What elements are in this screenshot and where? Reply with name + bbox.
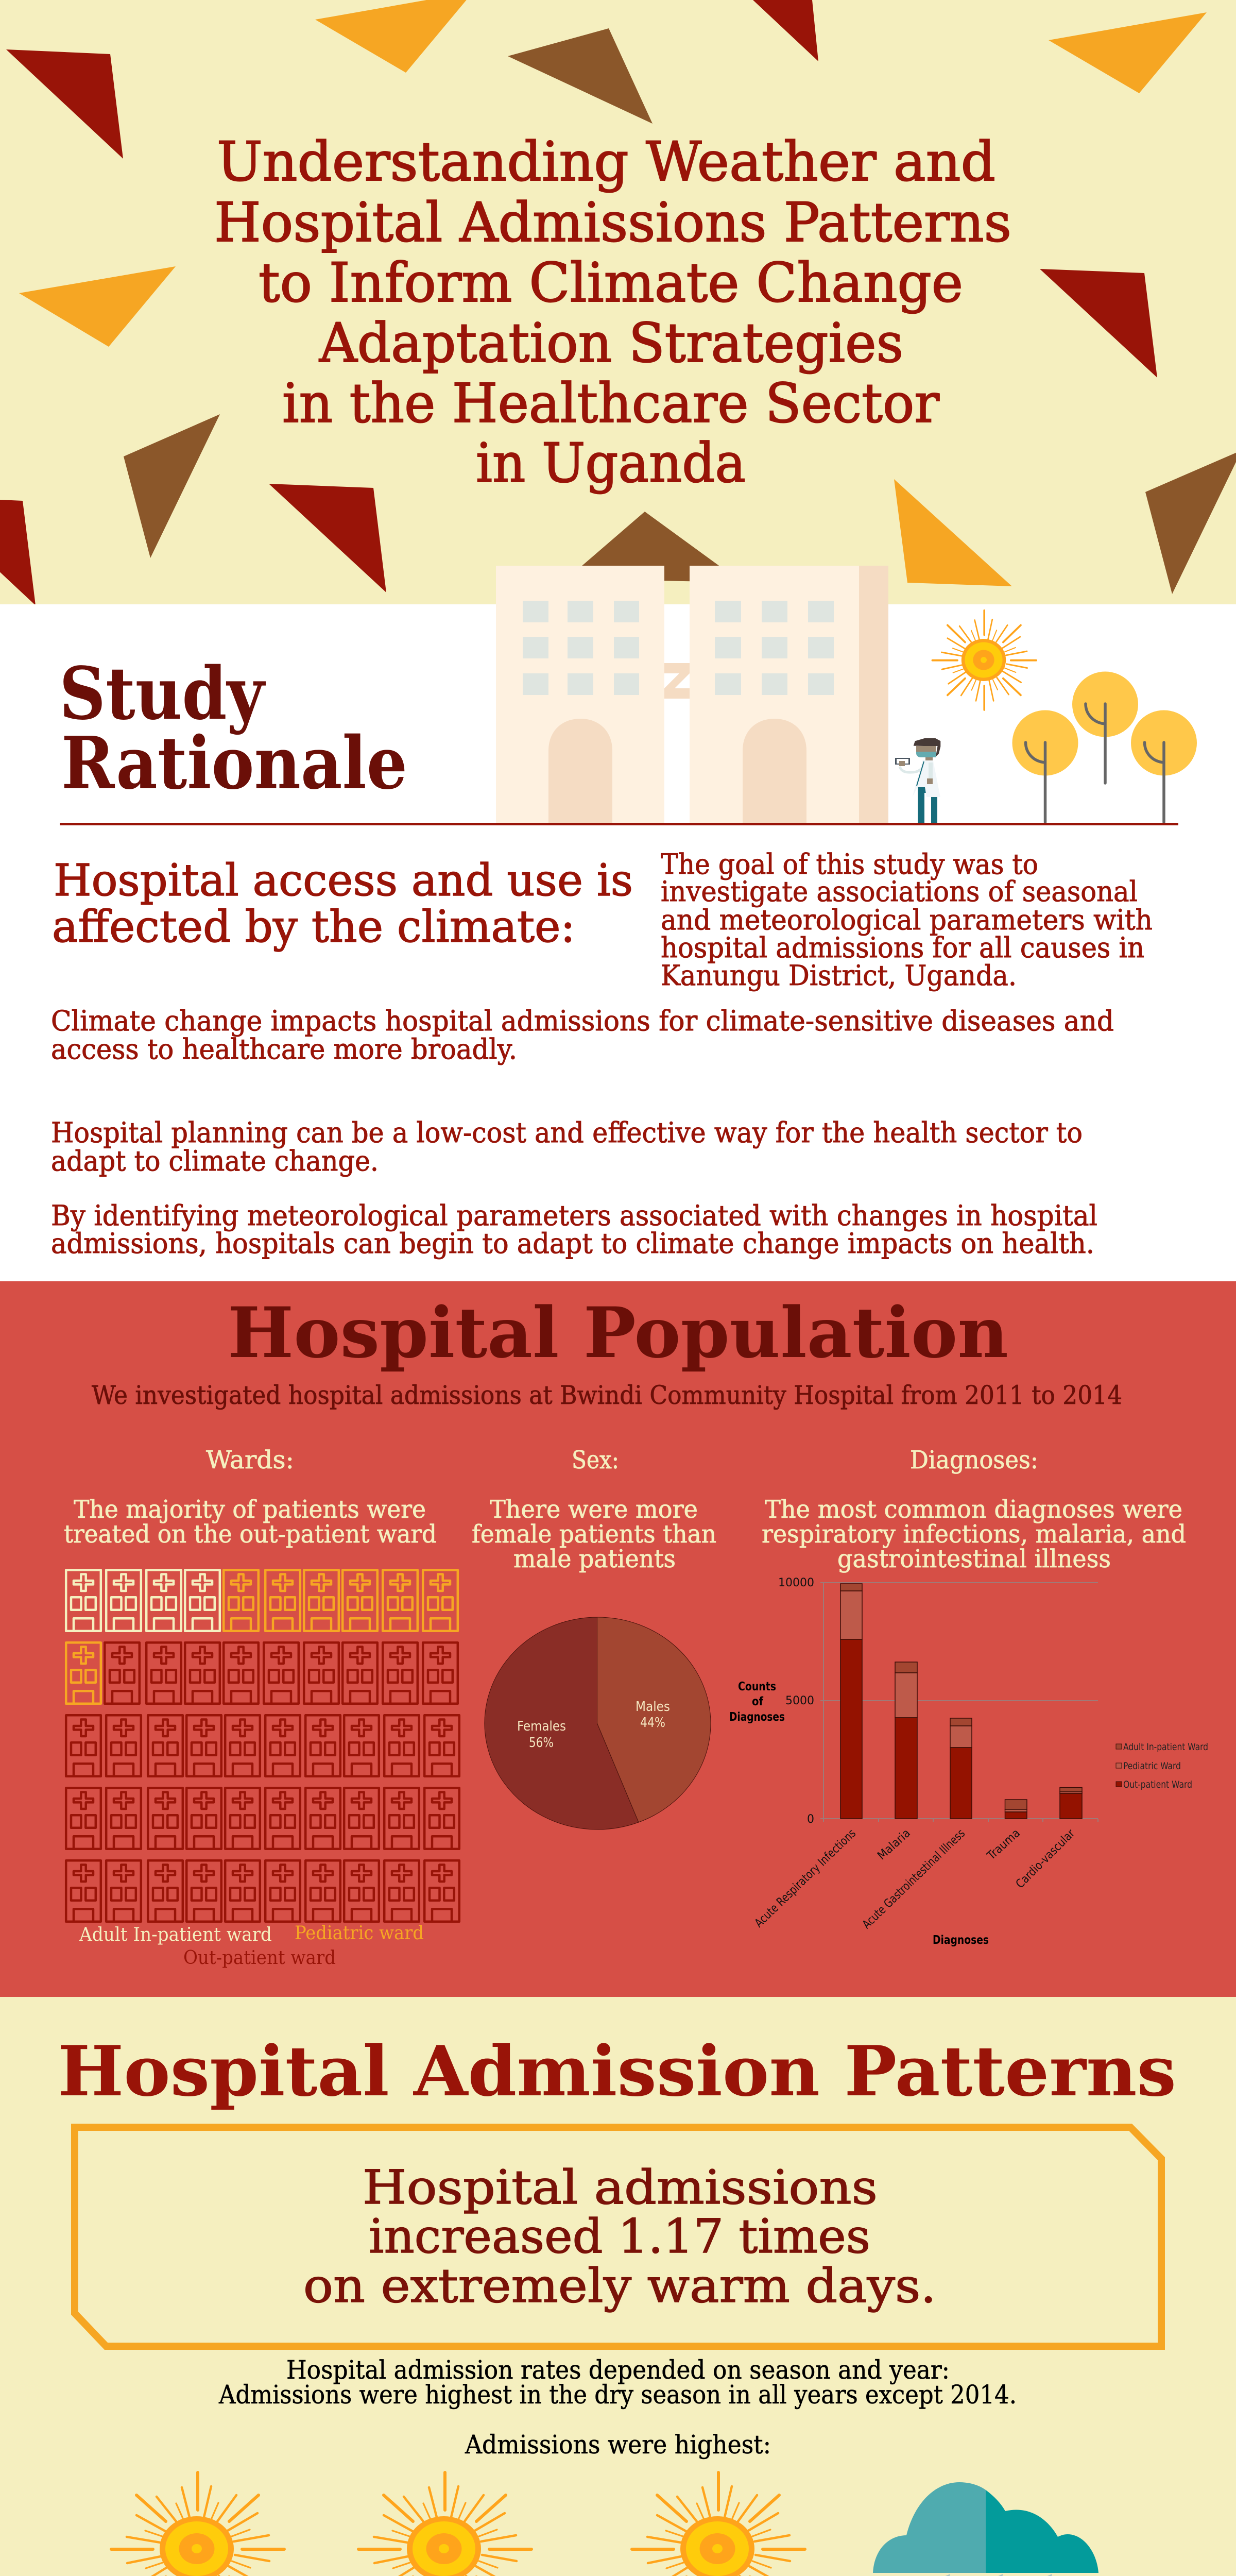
text: hospital planning: adapt to climate change. <box>51 1145 379 1177</box>
section heading: study rationale <box>59 652 407 806</box>
ground line <box>60 823 1178 825</box>
chart: diagnoses stacked bars: Acute Respiratory Infections <box>752 1827 859 1930</box>
callout text: increased 1.17 times <box>369 2210 870 2264</box>
subheading: climate access: affected by the climate: <box>52 902 575 953</box>
text: hospital planning <box>51 1116 1083 1177</box>
legend: wards: Pediatric ward <box>295 1923 424 1944</box>
text: study goal: hospital admissions for all causes in <box>661 931 1144 964</box>
subheading: diagnoses: respiratory infections, malaria, and <box>762 1520 1186 1549</box>
panel: study rationale <box>0 566 1236 1281</box>
text: identifying parameters <box>51 1199 1097 1260</box>
chart: sex pie: 56% <box>529 1735 554 1751</box>
icon: sun <box>932 611 1036 710</box>
panel: hospital admission patterns <box>0 1997 1236 2576</box>
title: Hospital Admissions Patterns <box>214 191 1011 254</box>
subheading: wards: The majority of patients were <box>74 1495 426 1524</box>
chart: diagnoses stacked bars: 0 <box>807 1813 814 1826</box>
chart: diagnoses stacked bars: Acute Gastrointestinal Illness <box>860 1827 968 1931</box>
legend: wards <box>79 1923 424 1969</box>
text: identifying parameters: admissions, hospitals can begin to adapt to climate change impacts on health. <box>51 1227 1094 1260</box>
decorative triangles <box>0 0 1236 605</box>
chart: diagnoses stacked bars: 5000 <box>785 1694 814 1707</box>
chart: sex pie <box>485 1617 711 1829</box>
text: study goal: Kanungu District, Uganda. <box>661 959 1017 992</box>
illustration: doctor with phone <box>895 738 940 823</box>
title: Understanding Weather and <box>217 130 995 193</box>
chart: diagnoses stacked bars: Cardio-vascular <box>1014 1827 1078 1891</box>
callout frame <box>75 2127 1161 2346</box>
illustration: hospital building <box>496 566 888 823</box>
section heading: admission patterns: Hospital Admission Patterns <box>58 2030 1176 2112</box>
header background <box>0 0 1236 604</box>
subheading: wards: Wards: <box>206 1446 294 1475</box>
rationale background <box>0 604 1236 1281</box>
chart: sex pie: Males <box>636 1699 670 1715</box>
chart: diagnoses stacked bars: Malaria <box>875 1826 913 1862</box>
population background <box>0 1281 1236 1997</box>
text: climate change impacts <box>51 1005 1114 1065</box>
patterns background <box>0 1997 1236 2576</box>
chart: diagnoses stacked bars: Diagnoses <box>729 1710 785 1724</box>
subheading: sex <box>472 1446 716 1573</box>
legend: wards: Out-patient ward <box>183 1947 336 1969</box>
subheading: sex: There were more <box>490 1495 698 1524</box>
section heading: study rationale: Rationale <box>61 721 407 806</box>
subheading: climate access <box>52 855 633 953</box>
chart: diagnoses stacked bars: Pediatric Ward <box>1123 1760 1181 1772</box>
subheading: sex: male patients <box>513 1545 676 1573</box>
chart: diagnoses stacked bars: 10000 <box>778 1577 814 1589</box>
callout text: Hospital admissions <box>363 2161 878 2215</box>
title: in Uganda <box>476 432 746 495</box>
title: to Inform Climate Change <box>259 251 963 314</box>
subheading: diagnoses: Diagnoses: <box>910 1446 1038 1475</box>
panel: hospital population <box>0 1281 1236 1997</box>
title <box>214 130 1011 495</box>
subheading: diagnoses <box>762 1446 1186 1573</box>
title: Adaptation Strategies <box>319 312 903 375</box>
chart: ward icon array <box>66 1570 459 1922</box>
section heading: study rationale: Study <box>59 652 266 736</box>
chart: diagnoses stacked bars <box>729 1577 1208 1947</box>
icon: rain cloud 2014 <box>873 2482 1098 2576</box>
section heading: hospital population: Hospital Population <box>228 1292 1008 1374</box>
text: admissions were highest: Admissions were highest: <box>465 2430 771 2460</box>
icon: sun 2012 <box>358 2472 531 2576</box>
text: identifying parameters: By identifying meteorological parameters associated with changes in hospital <box>51 1199 1097 1232</box>
icon: trees <box>1012 672 1197 822</box>
chart: diagnoses stacked bars: Trauma <box>984 1826 1023 1863</box>
text: study goal: investigate associations of seasonal <box>661 875 1138 908</box>
chart: sex pie: Females <box>517 1719 566 1734</box>
chart: diagnoses stacked bars: Counts <box>738 1680 776 1693</box>
text: seasonal rates: Admissions were highest in the dry season in all years except 2014. <box>218 2380 1017 2410</box>
text: hospital planning: Hospital planning can be a low-cost and effective way for the health sector to <box>51 1116 1083 1149</box>
text: climate change impacts: access to healthcare more broadly. <box>51 1033 517 1065</box>
text: study goal: and meteorological parameters with <box>661 904 1153 936</box>
text: study site: We investigated hospital admissions at Bwindi Community Hospital from 2011 to 2014 <box>92 1380 1122 1410</box>
icon: sun 2013 <box>632 2472 805 2576</box>
chart: diagnoses stacked bars: Adult In-patient Ward <box>1123 1741 1208 1753</box>
panel: title header <box>0 0 1236 605</box>
text: study goal: The goal of this study was to <box>661 848 1038 880</box>
text: study goal <box>661 848 1153 992</box>
subheading: sex: Sex: <box>572 1446 619 1475</box>
text: seasonal rates <box>218 2355 1017 2410</box>
subheading: sex: female patients than <box>472 1520 716 1549</box>
subheading: climate access: Hospital access and use is <box>54 855 633 906</box>
subheading: diagnoses: gastrointestinal illness <box>837 1545 1111 1573</box>
chart: sex pie: 44% <box>640 1715 665 1731</box>
text: climate change impacts: Climate change impacts hospital admissions for climate-sensitive diseases and <box>51 1005 1114 1037</box>
callout text: on extremely warm days. <box>303 2259 936 2313</box>
legend: wards: Adult In-patient ward <box>79 1924 272 1945</box>
chart: diagnoses stacked bars: of <box>752 1695 764 1708</box>
chart: diagnoses stacked bars: Out-patient Ward <box>1123 1779 1192 1790</box>
icon: sun 2011 <box>111 2472 284 2576</box>
title: in the Healthcare Sector <box>282 372 940 435</box>
subheading: diagnoses: The most common diagnoses were <box>765 1495 1182 1524</box>
callout text <box>303 2161 936 2313</box>
text: seasonal rates: Hospital admission rates depended on season and year: <box>286 2355 950 2385</box>
subheading: wards: treated on the out-patient ward <box>64 1520 437 1549</box>
subheading: wards <box>64 1446 437 1549</box>
chart: diagnoses stacked bars: Diagnoses <box>933 1934 989 1947</box>
